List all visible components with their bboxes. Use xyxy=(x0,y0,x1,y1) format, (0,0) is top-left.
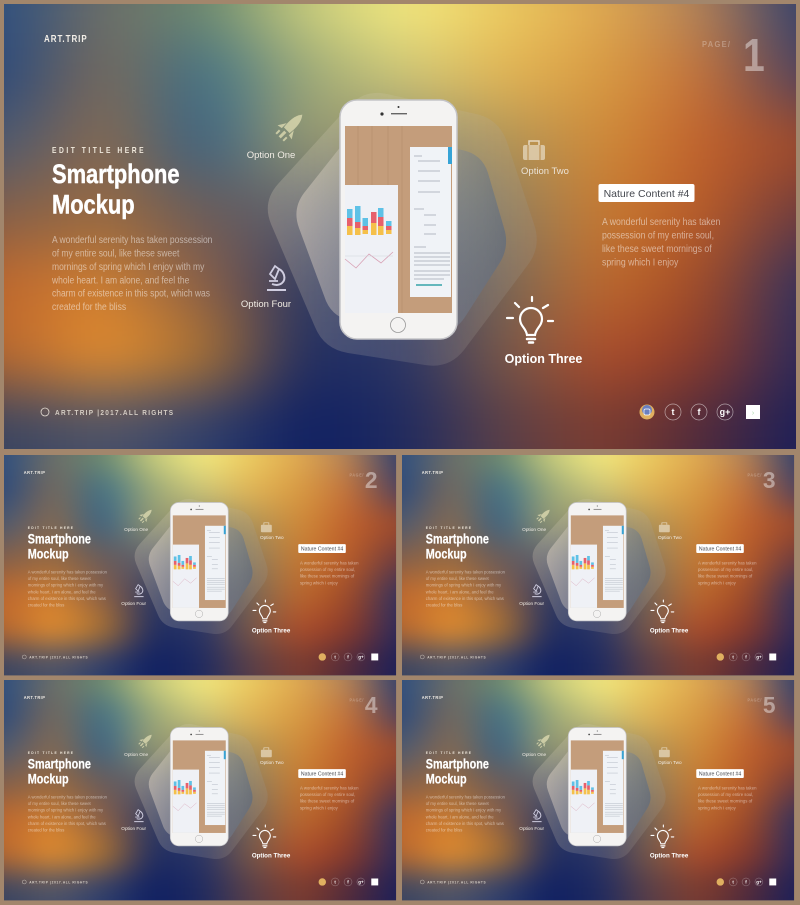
page number: PAGE/ xyxy=(748,697,762,702)
social icons: f xyxy=(347,654,349,659)
text block: left description: A wonderful serenity has taken possession xyxy=(28,794,107,799)
text block: right description: A wonderful serenity has taken xyxy=(698,560,757,565)
icon: light bulb xyxy=(651,825,674,848)
text block: right description: like these sweet mornings of xyxy=(602,243,712,254)
social icons: t xyxy=(732,879,734,884)
brand name: ART.TRIP xyxy=(422,694,443,700)
label: option three: Option Three xyxy=(252,628,291,635)
icon: briefcase xyxy=(659,523,670,532)
brand name: ART.TRIP xyxy=(44,33,88,44)
eyebrow: EDIT TITLE HERE xyxy=(52,145,146,155)
hexagon backdrop xyxy=(135,499,268,634)
text block: left description: of my entire soul, like these sweet xyxy=(28,801,91,806)
text block: right description: like these sweet mornings of xyxy=(300,798,355,804)
panel: slide 1 xyxy=(4,4,796,449)
text block: right description: like these sweet mornings of xyxy=(300,573,355,579)
page number: 1 xyxy=(743,30,765,82)
label: option three: Option Three xyxy=(252,853,291,860)
icon: rocket xyxy=(535,731,553,749)
text block: right description: like these sweet mornings of xyxy=(698,798,753,804)
label: option one: Option One xyxy=(522,527,547,532)
text block: left description: charm of existence in this spot, which was xyxy=(52,288,210,299)
icon: light bulb xyxy=(253,600,276,623)
social icons xyxy=(717,878,776,886)
page number: 3 xyxy=(763,467,776,493)
title: Smartphone xyxy=(426,757,489,772)
phone mockup xyxy=(568,503,626,621)
phone mockup xyxy=(170,728,228,846)
title: Mockup xyxy=(52,190,135,220)
text block: right description: A wonderful serenity has taken xyxy=(602,216,720,227)
icon: rocket xyxy=(137,731,155,749)
text block: left description: A wonderful serenity has taken possession xyxy=(52,234,212,245)
brand name: ART.TRIP xyxy=(24,694,45,700)
page number: PAGE/ xyxy=(702,40,731,49)
icon: light bulb xyxy=(253,825,276,848)
text block: left description: charm of existence in this spot, which was xyxy=(28,595,106,601)
label: option one: Option One xyxy=(247,150,295,161)
social icons: f xyxy=(745,654,747,659)
page number: PAGE/ xyxy=(350,697,364,702)
label: option three: Option Three xyxy=(650,853,689,860)
page number: PAGE/ xyxy=(350,472,364,477)
footer copyright: ART.TRIP |2017.ALL RIGHTS xyxy=(55,410,174,417)
icon: rocket xyxy=(535,506,553,524)
title: Smartphone xyxy=(426,532,489,547)
social icons: g+ xyxy=(720,407,730,417)
eyebrow: EDIT TITLE HERE xyxy=(426,751,472,755)
icon: microscope xyxy=(267,266,286,290)
text block: right description: spring which I enjoy xyxy=(300,805,338,811)
icon: microscope xyxy=(134,810,144,822)
eyebrow: EDIT TITLE HERE xyxy=(28,526,74,530)
label: option three: Option Three xyxy=(505,352,582,366)
icon: microscope xyxy=(134,585,144,597)
footer copyright: ART.TRIP |2017.ALL RIGHTS xyxy=(29,655,88,660)
text block: left description: created for the bliss xyxy=(426,827,463,833)
text block: left description: mornings of spring which I enjoy with my xyxy=(426,807,502,813)
text block: left description: whole heart. I am alone, and feel the xyxy=(426,814,494,819)
label: option two: Option Two xyxy=(521,166,569,177)
label: option four: Option Four xyxy=(241,299,291,310)
eyebrow: EDIT TITLE HERE xyxy=(28,751,74,755)
icon: light bulb xyxy=(651,600,674,623)
label: option two: Option Two xyxy=(260,535,284,540)
text block: right description: possession of my entire soul, xyxy=(698,567,753,572)
social icons xyxy=(319,878,378,886)
callout: nature content xyxy=(696,769,744,778)
label: option one: Option One xyxy=(522,752,547,757)
social icons: g+ xyxy=(358,654,364,659)
page number xyxy=(350,692,378,718)
social icons xyxy=(319,653,378,661)
social icons: t xyxy=(732,654,734,659)
text block: right description: like these sweet mornings of xyxy=(698,573,753,579)
callout: nature content: Nature Content #4 xyxy=(699,772,741,778)
text block: right description: spring which I enjoy xyxy=(698,580,736,586)
social icons: g+ xyxy=(756,879,762,884)
callout: nature content: Nature Content #4 xyxy=(301,547,343,553)
text block: left description: A wonderful serenity has taken possession xyxy=(28,569,107,574)
page number xyxy=(748,692,776,718)
text block: right description: spring which I enjoy xyxy=(300,580,338,586)
label: option two: Option Two xyxy=(260,760,284,765)
panel: slide 5 xyxy=(402,680,794,900)
social icons: g+ xyxy=(756,654,762,659)
text block: left description: mornings of spring which I enjoy with my xyxy=(28,582,104,588)
callout: nature content: Nature Content #4 xyxy=(699,547,741,553)
page number xyxy=(702,30,765,82)
text block: left description: mornings of spring which I enjoy with my xyxy=(28,807,104,813)
title: Smartphone xyxy=(52,160,179,190)
icon: rocket xyxy=(273,108,309,144)
page number xyxy=(350,467,378,493)
text block: left description: created for the bliss xyxy=(28,827,65,833)
text block: right description: possession of my entire soul, xyxy=(698,792,753,797)
title: Mockup xyxy=(426,772,467,787)
title: Mockup xyxy=(28,547,69,562)
callout: nature content xyxy=(298,544,346,553)
icon: briefcase xyxy=(659,748,670,757)
social icons: g+ xyxy=(358,879,364,884)
hexagon backdrop xyxy=(533,724,666,859)
panel: slide 4 xyxy=(4,680,396,900)
social icons: f xyxy=(698,407,702,417)
icon: microscope xyxy=(532,585,542,597)
text block: right description: A wonderful serenity has taken xyxy=(300,785,359,790)
text block: left description: whole heart. I am alone, and feel the xyxy=(28,589,96,594)
social icons: t xyxy=(672,407,674,417)
icon: rocket xyxy=(137,506,155,524)
label: option two: Option Two xyxy=(658,535,682,540)
page number xyxy=(748,467,776,493)
text block: left description: whole heart. I am alone, and feel the xyxy=(28,814,96,819)
panel: slide 2 xyxy=(4,455,396,675)
text block: right description: possession of my entire soul, xyxy=(602,230,714,241)
text block: right description: possession of my entire soul, xyxy=(300,792,355,797)
phone mockup xyxy=(568,728,626,846)
text block: left description: mornings of spring which I enjoy with my xyxy=(426,582,502,588)
social icons: f xyxy=(745,879,747,884)
text block: left description: of my entire soul, like these sweet xyxy=(426,576,489,581)
social icons xyxy=(640,404,760,420)
label: option four: Option Four xyxy=(121,601,146,606)
text block: left description: charm of existence in this spot, which was xyxy=(426,595,504,601)
text block: left description: created for the bliss xyxy=(52,301,126,312)
hexagon backdrop xyxy=(268,93,537,366)
text block: left description: of my entire soul, like these sweet xyxy=(52,248,180,259)
text block: left description: A wonderful serenity has taken possession xyxy=(426,569,505,574)
icon: briefcase xyxy=(261,748,272,757)
phone mockup xyxy=(340,100,457,339)
text block: right description: spring which I enjoy xyxy=(698,805,736,811)
text block: left description: charm of existence in this spot, which was xyxy=(28,820,106,826)
brand name: ART.TRIP xyxy=(422,469,443,475)
text block: left description: whole heart. I am alone, and feel the xyxy=(426,589,494,594)
icon: microscope xyxy=(532,810,542,822)
text block: left description: A wonderful serenity has taken possession xyxy=(426,794,505,799)
text block: left description: of my entire soul, like these sweet xyxy=(28,576,91,581)
label: option one: Option One xyxy=(124,527,149,532)
page number: 5 xyxy=(763,692,776,718)
callout: nature content: Nature Content #4 xyxy=(604,188,690,200)
panel: slide 3 xyxy=(402,455,794,675)
callout: nature content: Nature Content #4 xyxy=(301,772,343,778)
label: option one: Option One xyxy=(124,752,149,757)
text block: right description: A wonderful serenity has taken xyxy=(300,560,359,565)
social icons: t xyxy=(334,879,336,884)
icon: briefcase xyxy=(523,141,545,160)
social icons: f xyxy=(347,879,349,884)
title: Mockup xyxy=(426,547,467,562)
title: Smartphone xyxy=(28,757,91,772)
label: option four: Option Four xyxy=(121,826,146,831)
page number: PAGE/ xyxy=(748,472,762,477)
label: option three: Option Three xyxy=(650,628,689,635)
label: option two: Option Two xyxy=(658,760,682,765)
footer copyright: ART.TRIP |2017.ALL RIGHTS xyxy=(29,880,88,885)
page number: 2 xyxy=(365,467,378,493)
text block: left description: created for the bliss xyxy=(28,602,65,608)
footer copyright: ART.TRIP |2017.ALL RIGHTS xyxy=(427,880,486,885)
eyebrow: EDIT TITLE HERE xyxy=(426,526,472,530)
hexagon backdrop xyxy=(533,499,666,634)
text block: left description: charm of existence in this spot, which was xyxy=(426,820,504,826)
icon: light bulb xyxy=(507,297,553,342)
hexagon backdrop xyxy=(135,724,268,859)
text block: left description: mornings of spring which I enjoy with my xyxy=(52,261,205,272)
text block: left description: whole heart. I am alone, and feel the xyxy=(51,275,189,286)
text block: right description: possession of my entire soul, xyxy=(300,567,355,572)
icon: briefcase xyxy=(261,523,272,532)
label: option four: Option Four xyxy=(519,601,544,606)
title: Mockup xyxy=(28,772,69,787)
social icons xyxy=(717,653,776,661)
callout: nature content xyxy=(696,544,744,553)
callout: nature content xyxy=(598,184,694,202)
label: option four: Option Four xyxy=(519,826,544,831)
text block: right description: A wonderful serenity has taken xyxy=(698,785,757,790)
footer copyright: ART.TRIP |2017.ALL RIGHTS xyxy=(427,655,486,660)
social icons: t xyxy=(334,654,336,659)
callout: nature content xyxy=(298,769,346,778)
brand name: ART.TRIP xyxy=(24,469,45,475)
text block: left description: of my entire soul, like these sweet xyxy=(426,801,489,806)
social icons: › xyxy=(752,410,755,417)
page number: 4 xyxy=(365,692,378,718)
title: Smartphone xyxy=(28,532,91,547)
text block: right description: spring which I enjoy xyxy=(602,257,679,268)
text block: left description: created for the bliss xyxy=(426,602,463,608)
phone mockup xyxy=(170,503,228,621)
